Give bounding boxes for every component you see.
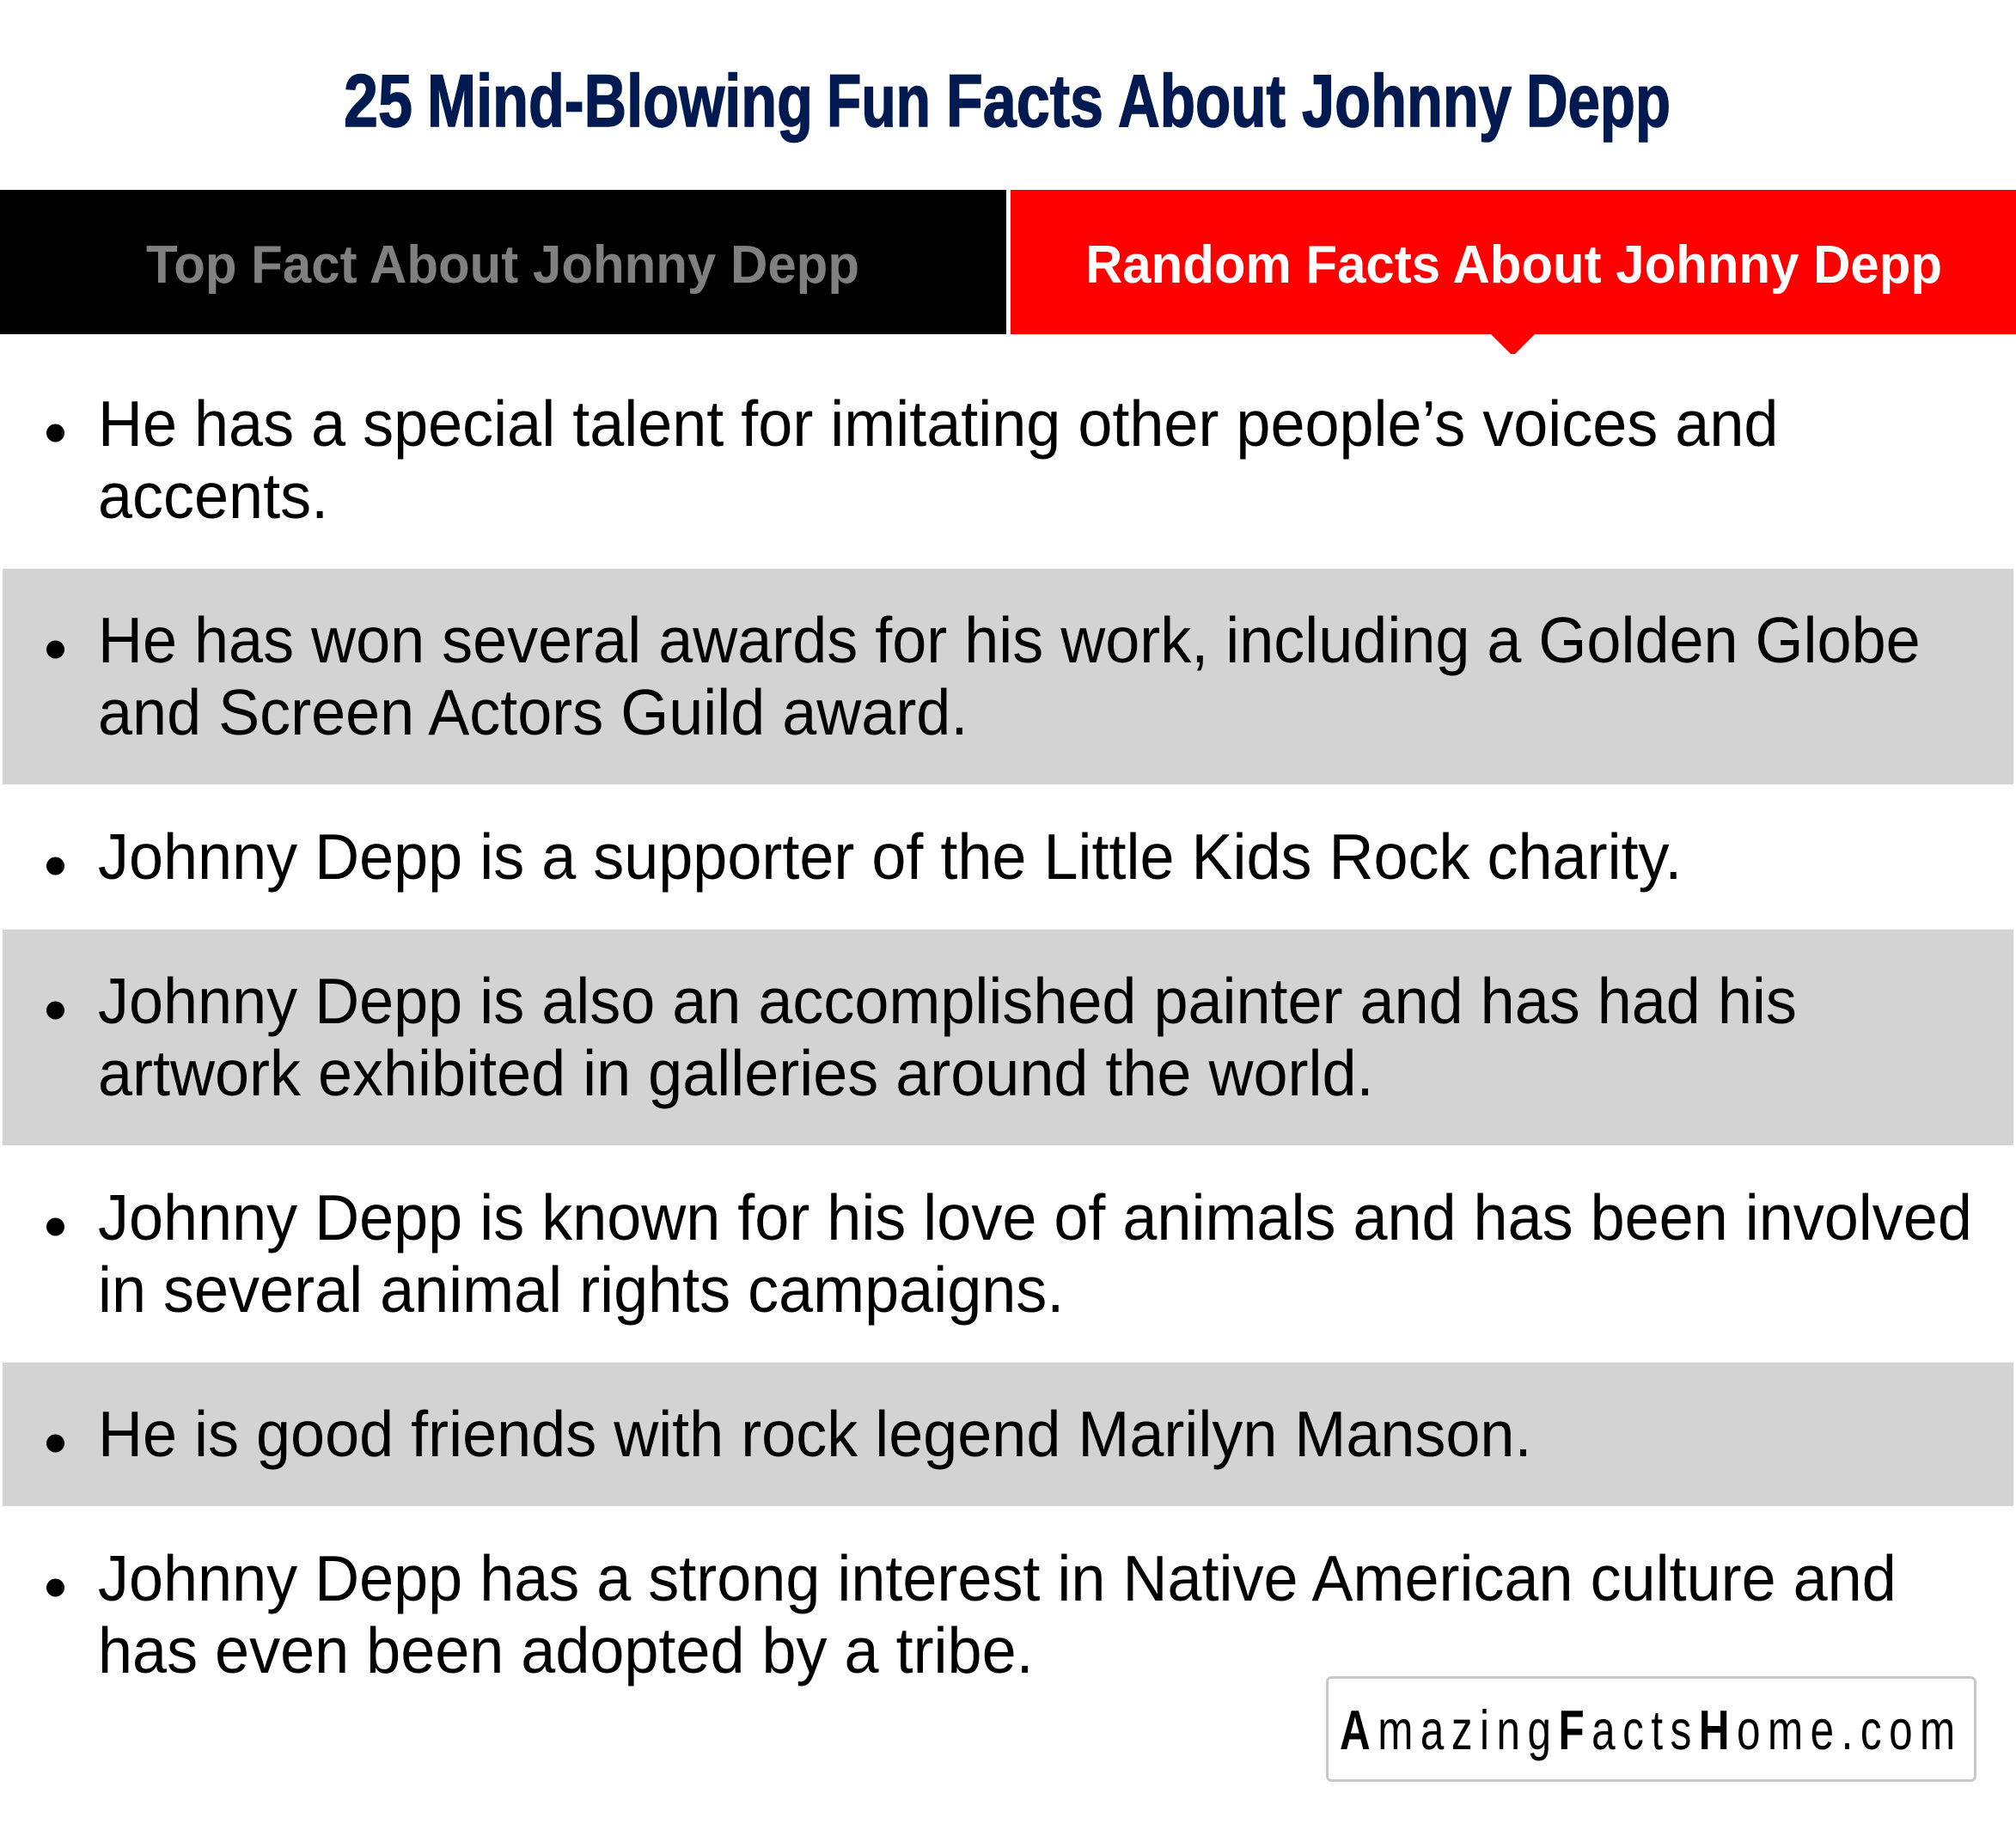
title: About [1118,60,1286,143]
fact 1: accents. [98,460,328,532]
title [344,60,1671,143]
fact 6 (grey band) [3,1363,2013,1506]
fact 2 (grey band): He has won several awards for his work, including a Golden Globe [98,604,1921,676]
fact 2 (grey band) [3,569,2013,784]
fact 7: Johnny Depp has a strong interest in Native American culture and [98,1542,1897,1614]
fact 7: has even been adopted by a tribe. [98,1614,1034,1686]
fact 5 [46,1181,1972,1326]
tab: random facts (active) [1011,190,2016,354]
title: Mind-Blowing [427,60,813,143]
fact 1: He has a special talent for imitating other people’s voices and [98,387,1778,460]
fact 4 (grey band) [3,930,2013,1145]
title: 25 [344,60,412,143]
fact 3: Johnny Depp is a supporter of the Little Kids Rock charity. [98,820,1682,893]
fact 4 (grey band): artwork exhibited in galleries around the world. [98,1037,1373,1109]
tab: top fact (inactive) [0,190,1006,334]
fact 5: Johnny Depp is known for his love of animals and has been involved [98,1181,1972,1253]
fact 5: in several animal rights campaigns. [98,1253,1064,1326]
tab: top fact (inactive): Top Fact About Johnny Depp [146,235,859,295]
fact 7 [46,1542,1897,1686]
watermark: AmazingFactsHome.com: AmazingFactsHome.com [1340,1700,1963,1762]
title: Depp [1526,60,1671,143]
title: Facts [946,60,1103,143]
fact 6 (grey band): He is good friends with rock legend Marilyn Manson. [98,1398,1531,1470]
watermark: AmazingFactsHome.com [1327,1677,1975,1780]
title: Fun [827,60,931,143]
tab: random facts (active): Random Facts About Johnny Depp [1085,235,1942,295]
fact 4 (grey band): Johnny Depp is also an accomplished painter and has had his [98,965,1797,1037]
title: Johnny [1302,60,1512,143]
fact 2 (grey band): and Screen Actors Guild award. [98,676,968,748]
fact 1 [46,387,1778,532]
